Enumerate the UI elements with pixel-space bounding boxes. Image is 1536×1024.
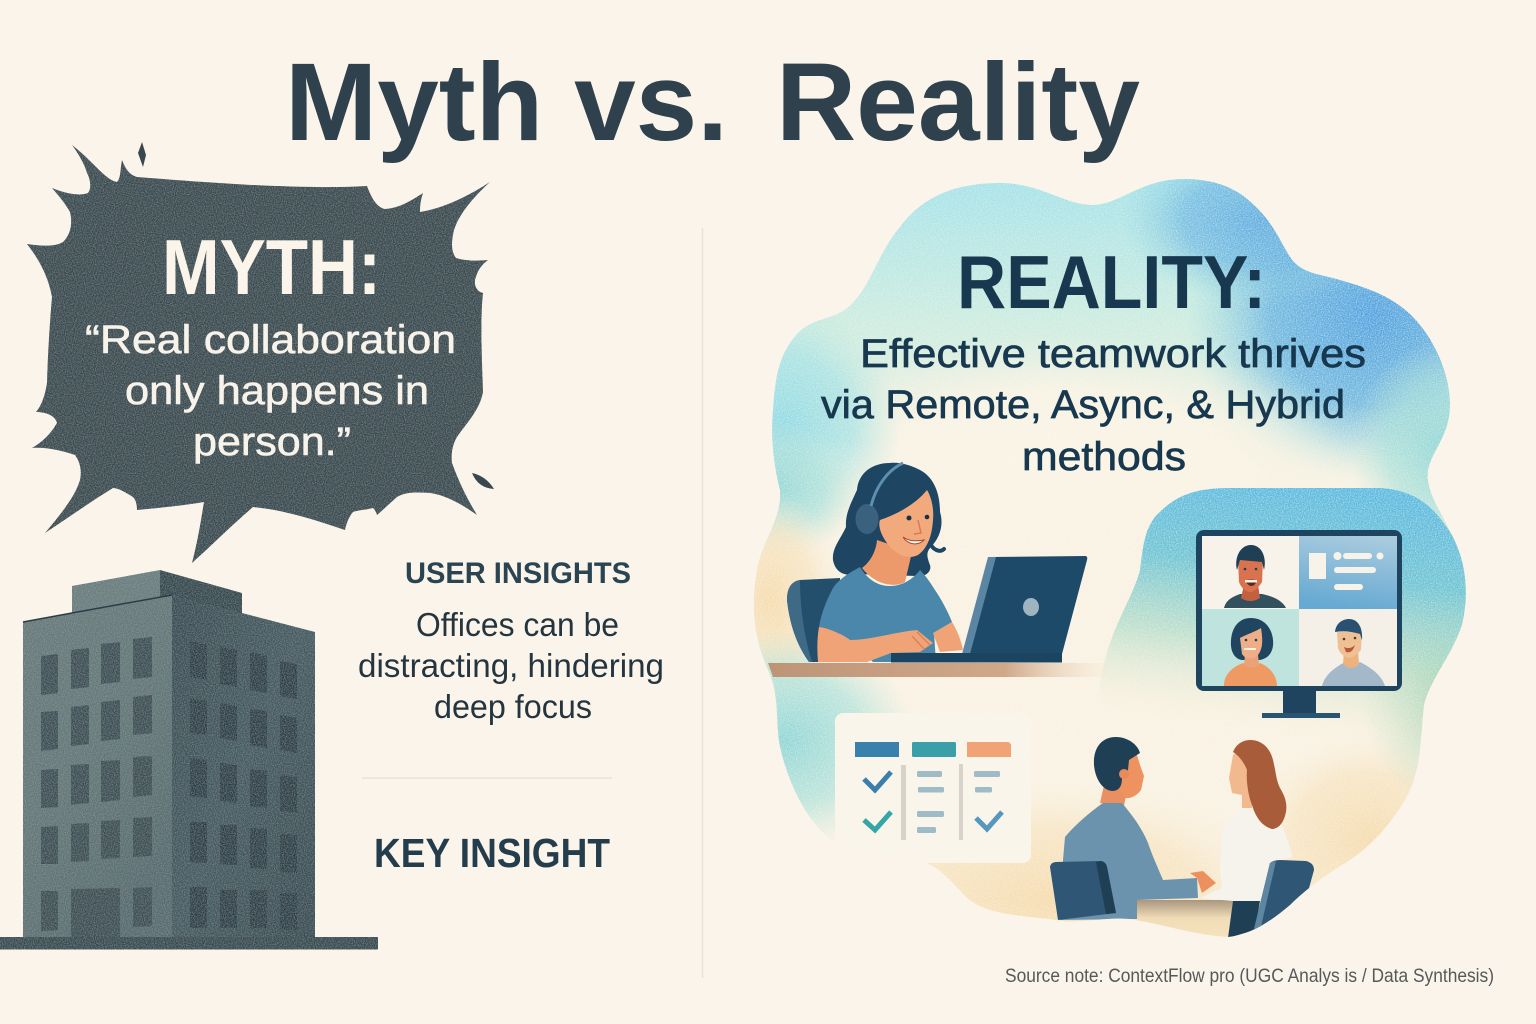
- neck: [862, 540, 912, 585]
- source note: Source note: ContextFlow pro (UGC Analys is / Data Synthesis): [1005, 966, 1494, 987]
- user insights body: distracting, hindering: [358, 647, 664, 684]
- table: [1137, 900, 1233, 940]
- reality statement: Effective teamwork thrives: [860, 332, 1366, 376]
- man hair: [1094, 737, 1140, 791]
- woman hair: [1233, 740, 1286, 829]
- right windows: [190, 641, 297, 930]
- user insights body: Offices can be: [416, 606, 619, 643]
- man chair: [1050, 861, 1116, 920]
- left face: [23, 595, 172, 937]
- monitor stand: [1283, 690, 1316, 714]
- monitor frame: [1196, 530, 1402, 691]
- reality statement: via Remote, Async, & Hybrid: [821, 383, 1345, 427]
- panel: reality blob: [754, 179, 1466, 937]
- ground slab: [0, 937, 378, 950]
- left windows: [41, 637, 152, 937]
- check marks: [864, 772, 891, 790]
- desk: [768, 663, 1107, 677]
- person: man in dark shirt: [1224, 545, 1286, 608]
- nose: [914, 520, 921, 534]
- reality statement: methods: [1022, 435, 1186, 479]
- woman face: [1229, 754, 1252, 808]
- eyes: [906, 516, 912, 520]
- laptop base: [891, 653, 1062, 662]
- man hand: [1190, 871, 1216, 893]
- burst fragment bottom right: [472, 473, 494, 489]
- key insight label: KEY INSIGHT: [374, 830, 610, 876]
- woman trousers: [1228, 901, 1260, 938]
- myth quote: “Real collaboration: [85, 318, 456, 362]
- user insights body: deep focus: [434, 688, 592, 725]
- face: [879, 490, 933, 557]
- headset band: [871, 463, 903, 506]
- column headers: [855, 742, 899, 757]
- title: Reality: [776, 41, 1140, 164]
- user insights body: [358, 606, 664, 725]
- laptop screen: [963, 556, 1087, 654]
- user insights heading: USER INSIGHTS: [405, 557, 631, 590]
- blue shirt: [819, 567, 952, 662]
- monitor backdrop lobe: [1101, 488, 1466, 712]
- tile: bottom left: [1202, 609, 1299, 686]
- title: [285, 41, 1140, 164]
- tile: shared slides: [1299, 536, 1397, 609]
- person: man in grey-blue: [1322, 619, 1385, 686]
- back hair: [833, 463, 942, 576]
- panel: myth speech burst: [27, 142, 494, 563]
- icon: office building: [0, 570, 378, 950]
- illustration: task board card: [835, 713, 1031, 863]
- myth quote: only happens in: [125, 369, 429, 413]
- reality statement: [821, 332, 1366, 479]
- hand detail: [912, 632, 930, 650]
- rooftop block: [72, 570, 160, 613]
- man shirt: [1060, 803, 1198, 920]
- illustration: video call monitor: [1196, 530, 1402, 718]
- illustration: woman at laptop with headset: [768, 463, 1107, 677]
- burst fragment top: [138, 142, 146, 167]
- roof edge: [23, 595, 172, 622]
- man ear: [1119, 769, 1129, 779]
- chair: [787, 578, 840, 662]
- woman chair: [1253, 860, 1314, 933]
- column dividers: [901, 765, 906, 840]
- arms: [817, 622, 963, 662]
- right face: [172, 595, 315, 937]
- burst shape: [27, 145, 490, 563]
- man neck and face: [1100, 787, 1126, 806]
- card: [835, 713, 1031, 863]
- reality heading: REALITY:: [957, 240, 1266, 324]
- myth quote: [85, 318, 456, 464]
- panel: user insights: [358, 557, 664, 725]
- task bars: [917, 771, 1000, 833]
- person: woman in orange: [1224, 618, 1277, 686]
- illustration: two colleagues meeting: [1050, 737, 1314, 940]
- myth quote: person.”: [193, 420, 351, 464]
- myth heading: MYTH:: [162, 223, 381, 311]
- headset mic: [930, 543, 944, 551]
- tile: bottom right: [1299, 609, 1397, 686]
- blob gradient background: [754, 179, 1466, 935]
- headset earcup: [856, 504, 878, 534]
- laptop logo: [1023, 598, 1039, 616]
- title: Myth vs.: [285, 41, 728, 164]
- tile: top left: [1202, 536, 1299, 609]
- woman torso: [1200, 808, 1292, 901]
- smile: [903, 537, 924, 544]
- slide content: [1309, 552, 1384, 590]
